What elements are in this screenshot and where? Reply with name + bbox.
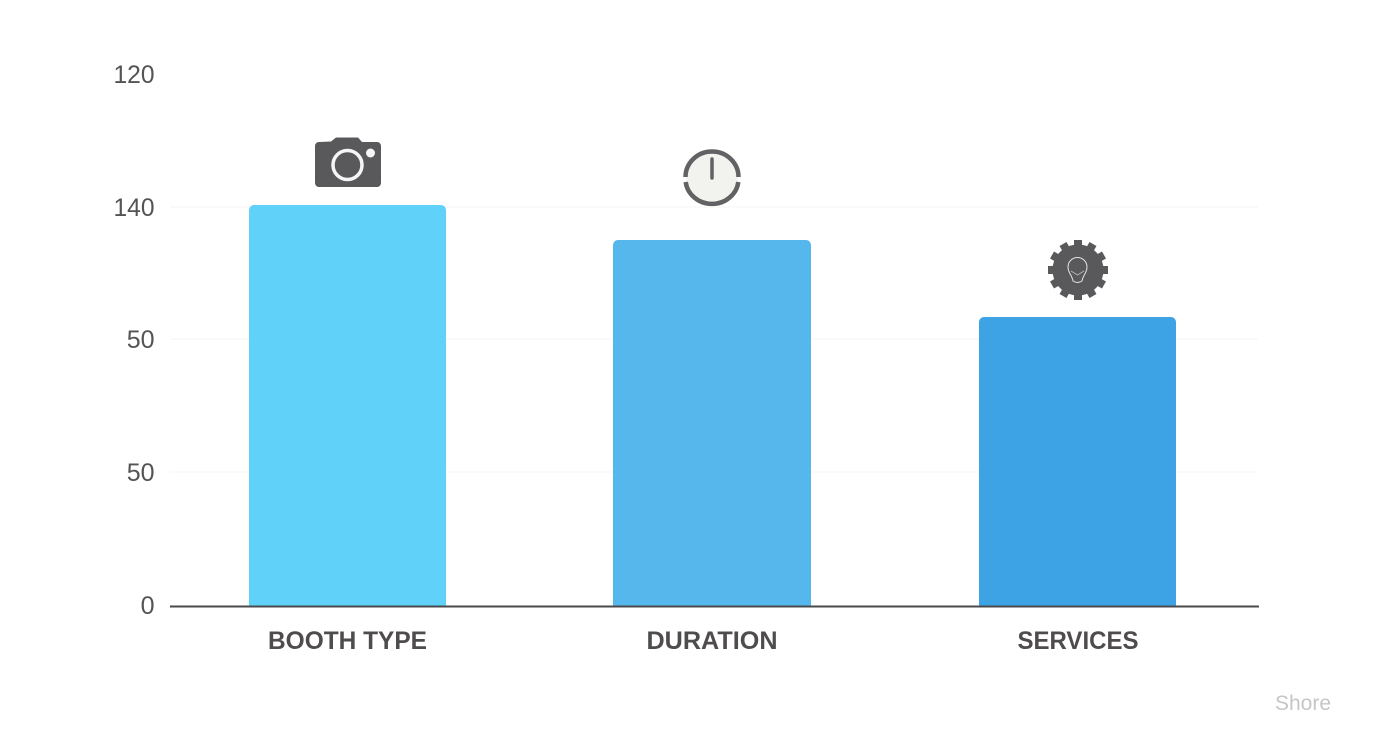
x-axis line xyxy=(170,606,1259,608)
x-axis labels xyxy=(268,627,1138,655)
bar: services xyxy=(979,317,1176,607)
bar: booth type xyxy=(249,205,446,607)
x-axis labels: DURATION xyxy=(646,627,778,655)
y-axis labels: 50 xyxy=(127,326,154,354)
y-axis labels xyxy=(114,61,154,620)
y-axis labels: 50 xyxy=(127,459,154,487)
x-axis labels: SERVICES xyxy=(1018,627,1138,655)
icon: clock xyxy=(686,152,738,204)
icon: camera xyxy=(315,138,381,187)
icon: gear with light bulb xyxy=(1048,240,1108,300)
y-axis labels: 120 xyxy=(114,61,154,89)
watermark: Shore: Shore xyxy=(1275,692,1331,715)
bar: duration xyxy=(613,240,811,607)
x-axis labels: BOOTH TYPE xyxy=(268,627,427,655)
y-axis labels: 0 xyxy=(141,592,154,620)
y-axis labels: 140 xyxy=(114,194,154,222)
